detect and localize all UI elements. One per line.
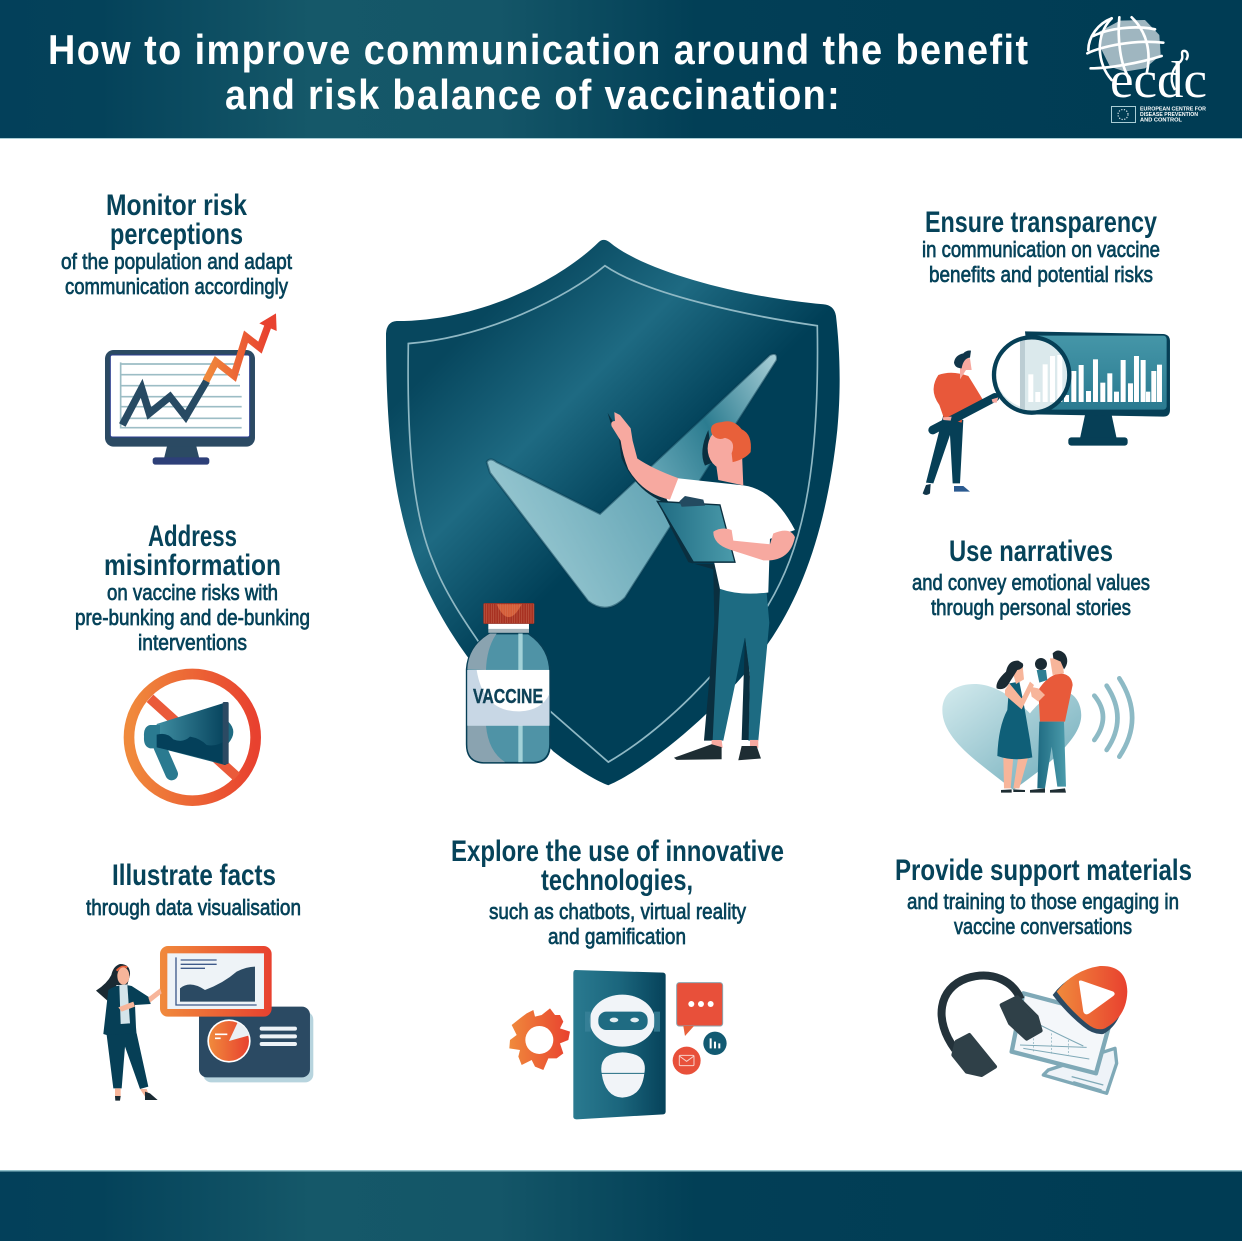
center illustration: shield with check mark bbox=[386, 240, 840, 785]
icon: headphones, documents and play button bbox=[942, 966, 1127, 1093]
text block: use narratives bbox=[912, 535, 1150, 620]
text block: address misinformation: pre-bunking and de-bunking bbox=[75, 605, 310, 630]
text block: monitor risk perceptions: of the population and adapt bbox=[61, 249, 292, 274]
text block: explore innovative technologies: Explore the use of innovative bbox=[451, 835, 784, 868]
text block: explore innovative technologies: technologies, bbox=[541, 864, 693, 897]
text block: provide support materials: and training to those engaging in bbox=[907, 889, 1179, 914]
logo: ecdc bbox=[1087, 17, 1207, 123]
title bbox=[48, 27, 1028, 118]
text block: ensure transparency: in communication on vaccine bbox=[922, 237, 1160, 262]
text block: use narratives: and convey emotional values bbox=[912, 570, 1150, 595]
text block: explore innovative technologies bbox=[451, 835, 784, 949]
text block: address misinformation: Address bbox=[148, 520, 237, 553]
text block: address misinformation bbox=[75, 520, 310, 655]
check mark bbox=[487, 354, 777, 608]
logo: ecdc: ecdc bbox=[1110, 52, 1207, 109]
logo: ecdc: DISEASE PREVENTION bbox=[1140, 112, 1198, 118]
text block: use narratives: through personal stories bbox=[931, 595, 1131, 620]
text block: address misinformation: on vaccine risks with bbox=[107, 580, 278, 605]
logo: ecdc: AND CONTROL bbox=[1140, 118, 1183, 124]
icon: chatbot phone with gear and bubbles bbox=[509, 970, 727, 1119]
text block: illustrate facts bbox=[86, 859, 301, 920]
text block: address misinformation: interventions bbox=[138, 630, 247, 655]
text block: monitor risk perceptions bbox=[61, 189, 292, 299]
text block: ensure transparency bbox=[922, 206, 1160, 287]
vaccine bottle bbox=[467, 603, 550, 763]
vaccine bottle: VACCINE bbox=[473, 686, 543, 708]
icon: crossed-out megaphone bbox=[129, 674, 256, 801]
text block: explore innovative technologies: and gamification bbox=[548, 924, 686, 949]
icon: monitor with rising chart bbox=[105, 313, 277, 465]
figure: man pointing with clipboard bbox=[608, 412, 795, 760]
text block: address misinformation: misinformation bbox=[104, 549, 281, 582]
text block: ensure transparency: Ensure transparency bbox=[925, 206, 1157, 239]
text block: illustrate facts: Illustrate facts bbox=[112, 859, 276, 892]
text block: ensure transparency: benefits and potential risks bbox=[929, 262, 1153, 287]
text block: monitor risk perceptions: communication accordingly bbox=[65, 274, 288, 299]
icon: presenter with data cards bbox=[96, 946, 313, 1101]
header band bbox=[0, 0, 1242, 139]
icon: family with heart and sound waves bbox=[942, 650, 1132, 793]
logo: ecdc: EUROPEAN CENTRE FOR bbox=[1140, 106, 1206, 112]
footer band bbox=[0, 1170, 1242, 1241]
text block: monitor risk perceptions: Monitor risk bbox=[106, 189, 247, 222]
text block: provide support materials bbox=[895, 854, 1192, 939]
text block: use narratives: Use narratives bbox=[949, 535, 1113, 568]
icon: person with magnifying glass and monitor bbox=[923, 331, 1170, 495]
text block: illustrate facts: through data visualisation bbox=[86, 895, 301, 920]
text block: monitor risk perceptions: perceptions bbox=[110, 218, 243, 251]
title: How to improve communication around the benefit bbox=[48, 27, 1028, 73]
text block: provide support materials: vaccine conversations bbox=[954, 914, 1132, 939]
text block: explore innovative technologies: such as chatbots, virtual reality bbox=[489, 899, 746, 924]
title: and risk balance of vaccination: bbox=[225, 72, 840, 118]
